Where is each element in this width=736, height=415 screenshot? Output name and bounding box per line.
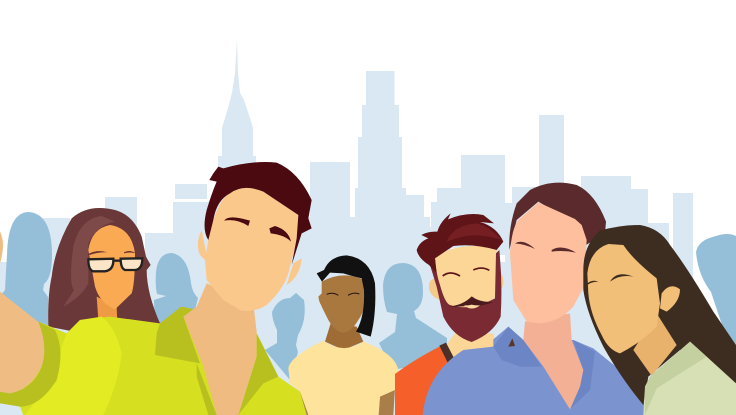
silhouette: right person — [696, 234, 736, 345]
neck — [523, 313, 583, 409]
woman with glasses — [48, 208, 161, 337]
lime shirt — [20, 317, 307, 415]
background silhouettes — [0, 212, 736, 380]
woman with long hair — [583, 225, 736, 415]
collar button — [508, 338, 515, 347]
t-shirt — [288, 341, 398, 415]
man with beard — [395, 213, 503, 415]
face — [88, 225, 135, 309]
hair highlight — [63, 216, 115, 307]
eyebrows — [515, 242, 576, 253]
hair — [509, 183, 606, 250]
silhouette: small man — [265, 293, 305, 380]
ear left — [198, 230, 208, 263]
sleeve cuff — [0, 322, 60, 407]
ears — [318, 293, 367, 310]
main man taking selfie — [0, 162, 312, 415]
eyebrows — [327, 293, 359, 295]
ear — [660, 286, 680, 312]
eyebrows — [224, 217, 291, 242]
neck — [97, 297, 117, 323]
collar left — [155, 307, 200, 363]
ear right — [287, 258, 302, 285]
arms — [300, 388, 395, 415]
eyebrows — [443, 268, 489, 276]
face — [510, 202, 587, 323]
hair highlight — [447, 223, 502, 242]
eyebrows — [88, 251, 136, 255]
neck — [633, 313, 677, 376]
arm — [0, 292, 45, 393]
collar shade — [645, 342, 707, 415]
silhouette: middle woman — [154, 253, 198, 330]
orange shirt — [395, 346, 457, 415]
hair — [317, 255, 375, 337]
moustache — [449, 296, 493, 307]
collar right — [238, 333, 278, 415]
silhouette: man — [379, 263, 447, 370]
collar shade — [493, 327, 595, 409]
mouth — [464, 305, 480, 308]
man with short black hair — [288, 255, 398, 415]
eyebrows — [587, 274, 633, 285]
hair — [583, 225, 736, 405]
ear right — [497, 270, 503, 293]
hair — [417, 213, 503, 273]
hair — [205, 162, 312, 265]
shirt highlight — [25, 317, 122, 415]
blue shirt — [423, 327, 645, 415]
face — [322, 275, 365, 333]
face — [435, 246, 497, 313]
shirt — [643, 342, 736, 415]
ear left — [429, 278, 440, 300]
placket shade — [197, 363, 217, 415]
glasses — [88, 258, 142, 271]
beard — [430, 250, 501, 342]
neck — [445, 333, 497, 365]
man in blue shirt — [423, 183, 645, 415]
shoulder strap — [439, 343, 454, 365]
face — [205, 188, 298, 311]
hair — [48, 208, 161, 337]
neck — [183, 283, 257, 415]
face — [587, 244, 660, 353]
neck — [325, 323, 363, 350]
hand at left edge — [0, 232, 3, 263]
silhouette: left woman — [0, 212, 52, 330]
